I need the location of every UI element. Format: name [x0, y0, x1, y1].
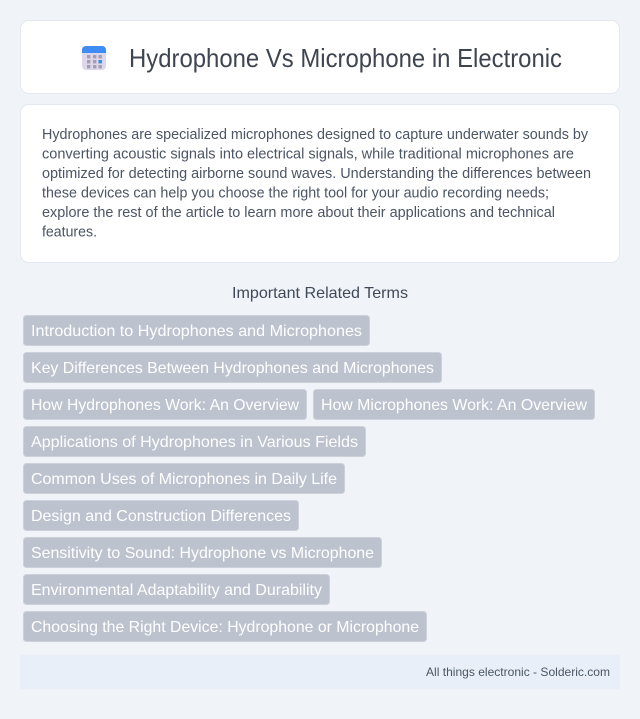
tag: how microphones work [314, 390, 594, 420]
title: Hydrophone Vs Microphone in Electronic [129, 45, 562, 73]
tag: how microphones work: How Microphones Work: An Overview [321, 397, 587, 414]
icon: calendar [82, 46, 106, 70]
footer: All things electronic - Solderic.com [426, 665, 610, 679]
tag: common uses [24, 464, 344, 494]
tag: design [24, 500, 298, 530]
intro paragraph: these devices can help you choose the right tool for your audio recording needs; [42, 186, 549, 202]
footer [20, 655, 620, 689]
tag: design: Design and Construction Differences [31, 508, 291, 525]
tag: key differences: Key Differences Between Hydrophones and Microphones [31, 360, 434, 377]
panel: related term tags [24, 316, 594, 642]
intro paragraph: explore the rest of the article to learn more about their applications and technical [42, 205, 555, 221]
panel: title card [20, 20, 620, 94]
tag: environmental: Environmental Adaptability and Durability [31, 582, 322, 599]
tag: applications: Applications of Hydrophones in Various Fields [31, 434, 358, 451]
intro paragraph: Hydrophones are specialized microphones designed to capture underwater sounds by [42, 127, 589, 143]
tag: environmental [24, 574, 330, 604]
tag: choosing: Choosing the Right Device: Hydrophone or Microphone [31, 619, 419, 636]
panel: introduction [20, 104, 620, 262]
intro paragraph [42, 127, 591, 240]
tag: how hydrophones work: How Hydrophones Work: An Overview [31, 397, 299, 414]
tag: sensitivity: Sensitivity to Sound: Hydrophone vs Microphone [31, 545, 374, 562]
tag: sensitivity [24, 538, 382, 568]
heading: related terms: Important Related Terms [232, 285, 408, 302]
intro paragraph: features. [42, 224, 97, 240]
tag: introduction: Introduction to Hydrophones and Microphones [31, 323, 362, 340]
intro paragraph: optimized for detecting airborne sound waves. Understanding the differences between [42, 166, 591, 182]
tag: key differences [24, 352, 442, 382]
tag: choosing [24, 612, 426, 642]
tag: how hydrophones work [24, 390, 306, 420]
intro paragraph: converting acoustic signals into electrical signals, while traditional microphones are [42, 146, 574, 162]
tag: common uses: Common Uses of Microphones in Daily Life [31, 471, 337, 488]
tag: applications [24, 426, 366, 456]
tag: introduction [24, 316, 370, 346]
